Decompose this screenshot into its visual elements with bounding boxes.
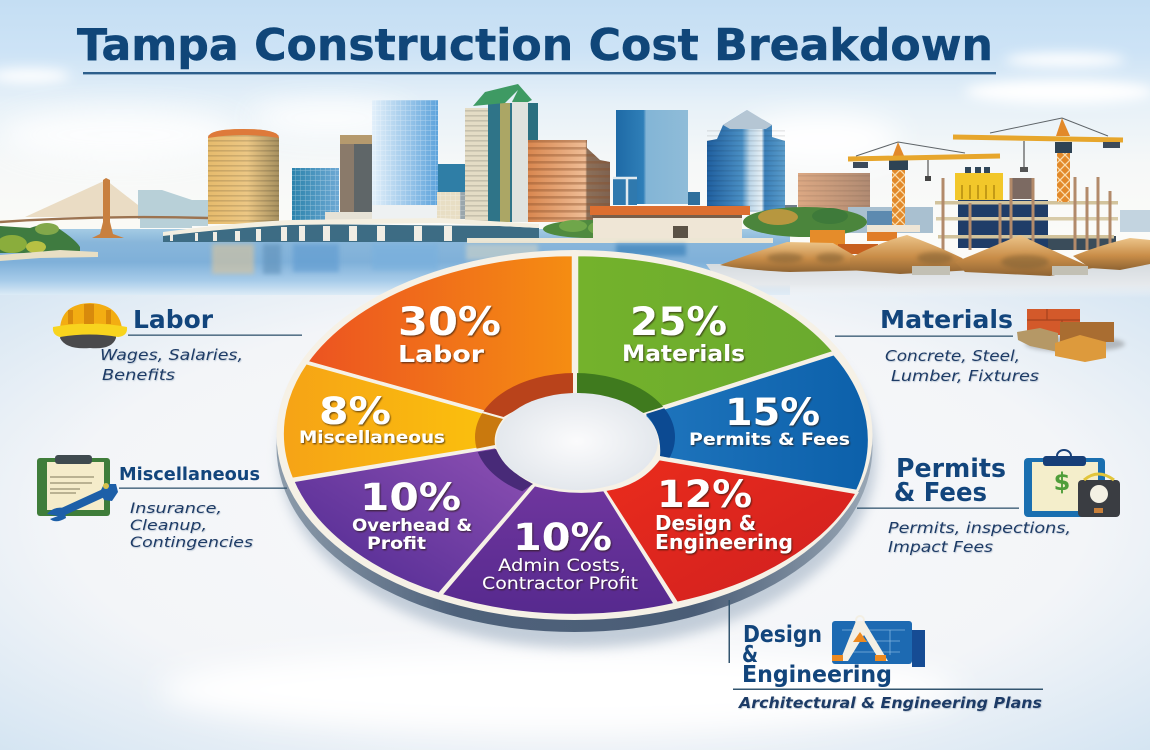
callout: Permits and Fees: & Fees — [894, 478, 987, 508]
callout: Permits and Fees: Permits, inspections, — [888, 519, 1071, 537]
callout: Labor: Labor — [133, 305, 214, 334]
tower cranes — [848, 118, 1123, 225]
segment labels: Overhead & — [352, 516, 472, 536]
construction building — [935, 167, 1118, 250]
callout: Permits and Fees: Impact Fees — [888, 538, 993, 556]
callout: Design and Engineering: Architectural & Engineering Plans — [738, 694, 1042, 712]
callout: Miscellaneous — [37, 455, 287, 551]
inner shaded ring — [475, 373, 675, 492]
round tower — [208, 129, 279, 224]
segment labels: 10% — [360, 476, 461, 519]
water reflections — [212, 244, 686, 274]
segment labels: 15% — [725, 391, 820, 434]
segment: Labor 30% — [307, 255, 573, 417]
icon: clipboard with wrench — [37, 455, 118, 521]
icon: clipboard with dollar sign and lock — [1024, 450, 1120, 517]
icon: blueprint and compass — [832, 616, 925, 667]
island — [0, 223, 98, 261]
callout: Labor — [53, 303, 302, 384]
callout: Design and Engineering: Engineering — [742, 662, 892, 688]
callout: Labor: Wages, Salaries, — [100, 346, 243, 364]
segment labels: Engineering — [655, 530, 793, 554]
segment: Admin Costs 10% — [441, 485, 675, 615]
trees — [543, 207, 867, 238]
towers — [292, 84, 1150, 233]
segment labels: Profit — [367, 534, 426, 554]
segment labels: 30% — [398, 300, 501, 345]
segment labels: Labor — [398, 342, 485, 368]
callout: Labor: Benefits — [102, 366, 175, 384]
ground and sand piles — [706, 225, 1150, 298]
icon: hard hat and goggles — [53, 303, 127, 348]
segment: Miscellaneous 8% — [283, 363, 503, 479]
callout: Design and Engineering: & — [742, 642, 758, 668]
water — [0, 229, 790, 295]
callout: Materials: Concrete, Steel, — [885, 347, 1020, 365]
segment labels: Permits & Fees — [689, 430, 850, 450]
title: Tampa Construction Cost Breakdown — [77, 20, 993, 71]
segment labels: Admin Costs, — [498, 556, 626, 576]
segment: Design and Engineering 12% — [604, 459, 857, 603]
callout: Design and Engineering: Design — [743, 622, 822, 648]
donut chart — [276, 250, 876, 648]
icon: bricks and lumber — [1017, 309, 1125, 362]
callout: Materials: Materials — [880, 305, 1013, 334]
callout: Materials — [835, 305, 1125, 385]
segment: Overhead and Profit 10% — [293, 447, 533, 594]
callout: Miscellaneous: Miscellaneous — [119, 464, 260, 485]
callout: Materials: Lumber, Fixtures — [891, 367, 1039, 385]
segment: Permits and Fees 15% — [644, 354, 869, 491]
scene: Tampa skyline, bay and construction site — [0, 84, 1150, 298]
callout: Design and Engineering — [728, 600, 1043, 712]
segment labels: Contractor Profit — [482, 574, 638, 594]
callout: Miscellaneous: Cleanup, — [130, 518, 207, 534]
low building with orange roof — [590, 206, 750, 238]
segment labels: 8% — [319, 390, 391, 433]
callout: Permits and Fees — [857, 450, 1120, 556]
segment labels: 12% — [657, 473, 752, 516]
bridge with cable towers — [0, 178, 208, 238]
center hole — [496, 393, 658, 490]
segment labels: 25% — [630, 300, 727, 345]
chart shadow and 3D edge — [276, 250, 876, 648]
segment labels — [299, 300, 850, 594]
segment labels: 10% — [513, 516, 612, 559]
segment labels: Materials — [622, 342, 745, 367]
segment labels: Miscellaneous — [299, 428, 445, 448]
callout: Miscellaneous: Insurance, — [130, 501, 222, 517]
callout: Miscellaneous: Contingencies — [130, 535, 254, 551]
segment: Materials 25% — [577, 255, 834, 413]
causeway bridge — [163, 218, 773, 243]
icon: clipboard with dollar sign and lock: $ — [1054, 468, 1070, 496]
callout: Permits and Fees: Permits — [896, 454, 1006, 484]
segment labels: Design & — [655, 511, 756, 535]
